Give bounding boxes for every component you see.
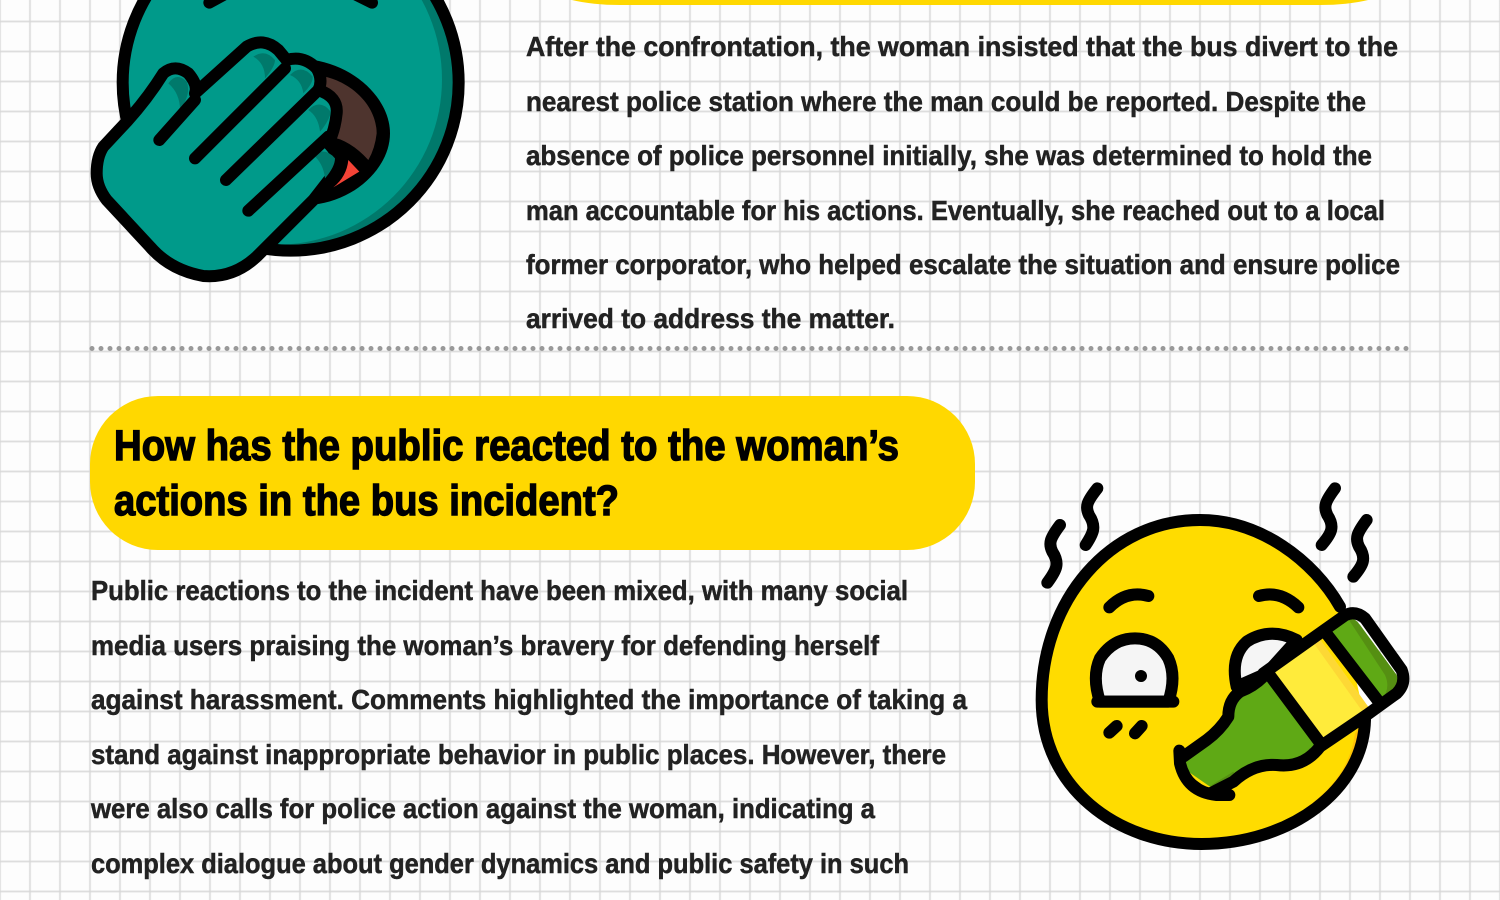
paragraph: after the confrontation: After the confrontation, the woman insisted that the bus divert to the: [526, 31, 1398, 62]
bottle: [1179, 613, 1403, 798]
head: [1042, 520, 1365, 844]
paragraph: public reactions: media users praising the woman’s bravery for defending herself: [91, 630, 880, 661]
paragraph: public reactions: Public reactions to the incident have been mixed, with many social: [91, 575, 908, 606]
paragraph: public reactions: were also calls for police action against the woman, indicating a: [90, 793, 875, 824]
steam: [1047, 488, 1367, 583]
right eye: [1235, 634, 1297, 687]
top heading pill (cut off by page edge): [560, 0, 1380, 5]
paragraph: after the confrontation: arrived to address the matter.: [526, 303, 895, 334]
paragraph: after the confrontation: man accountable for his actions. Eventually, she reached out to a local: [526, 195, 1385, 226]
paragraph: after the confrontation: absence of police personnel initially, she was determined to hold the: [526, 140, 1372, 171]
face: [111, 0, 459, 251]
heading pill: public reaction: [90, 396, 975, 550]
paragraph: public reactions: stand against inappropriate behavior in public places. However, there: [91, 739, 946, 770]
left eye: [1096, 638, 1173, 702]
icon: teal face with hand over mouth: [97, 0, 459, 276]
hand: [97, 42, 338, 276]
paragraph: public reactions: [90, 575, 967, 879]
mouth: [313, 60, 390, 205]
paragraph: after the confrontation: former corporator, who helped escalate the situation and ensure police: [526, 249, 1400, 280]
heading pill: public reaction: How has the public reacted to the woman’s: [114, 422, 899, 470]
dotted divider: [92, 346, 1410, 351]
paragraph: after the confrontation: [526, 31, 1400, 334]
icon: drunk yellow face with bottle: [1042, 488, 1403, 844]
paragraph: after the confrontation: nearest police station where the man could be reported. Despite the: [526, 86, 1366, 117]
paragraph: public reactions: against harassment. Comments highlighted the importance of taking a: [91, 684, 967, 715]
brows and freckles: [1109, 594, 1298, 733]
heading pill: public reaction: actions in the bus incident?: [114, 477, 619, 525]
paragraph: public reactions: complex dialogue about gender dynamics and public safety in such: [91, 848, 909, 879]
